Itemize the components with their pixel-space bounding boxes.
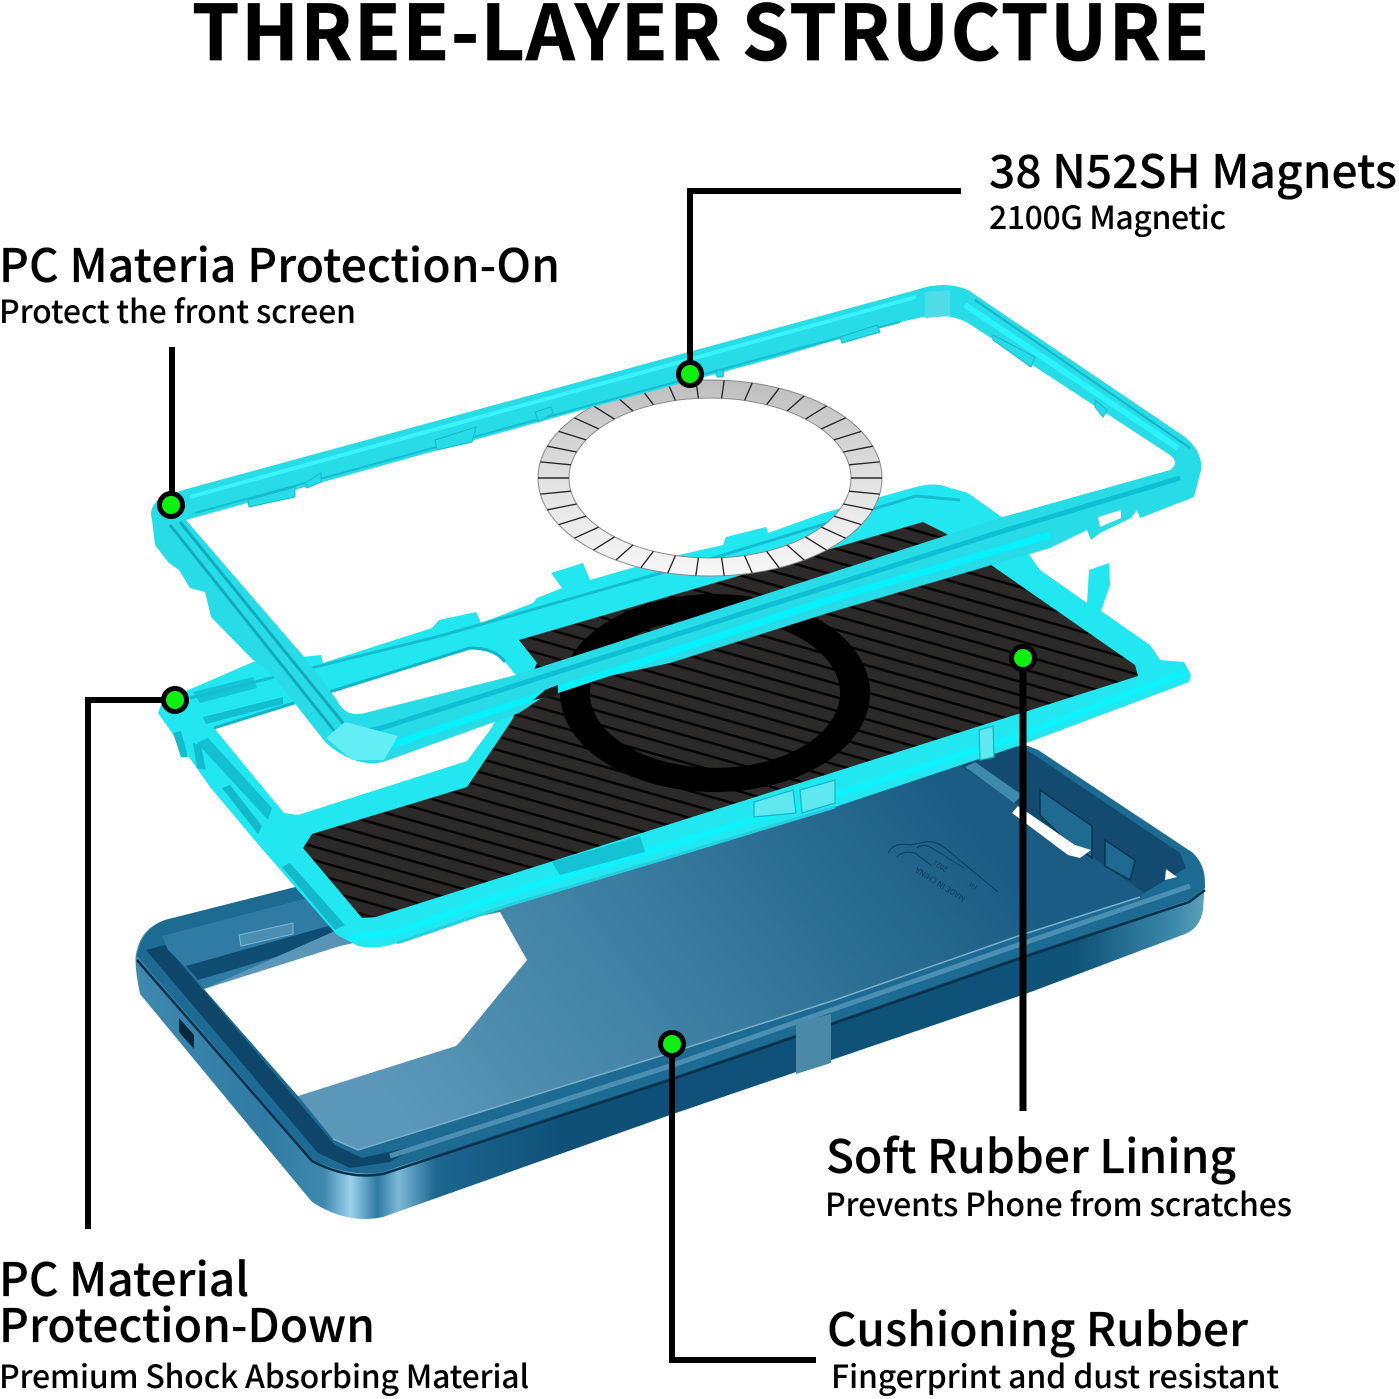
charging port <box>179 1018 194 1049</box>
layer: PC material protection-on frame <box>151 285 1201 763</box>
label: magnets <box>989 136 1397 239</box>
label: protection on <box>0 230 560 333</box>
label: protection down: Premium Shock Absorbing Material <box>0 1352 529 1398</box>
camera opening <box>214 648 520 815</box>
recess light strip <box>965 762 1022 803</box>
camera rim <box>214 648 505 728</box>
left rim dark band <box>146 945 420 1168</box>
bottom tabs dark <box>552 836 645 875</box>
black carbon panel <box>303 522 1138 918</box>
marker dots <box>160 362 1034 1056</box>
case top rim <box>137 735 1205 1173</box>
lower left dark strips <box>222 785 345 930</box>
upper frame body <box>151 285 1201 763</box>
top bar shadow strip <box>186 920 350 980</box>
slots at lower frame end <box>173 731 206 770</box>
embossed marking: Fit <box>967 879 980 892</box>
black magnetic ring <box>560 594 870 792</box>
upper frame bottom bar <box>345 478 1180 731</box>
corner highlight <box>925 290 950 318</box>
lower frame bright bottom edge <box>350 672 1186 938</box>
layer: PC material protection-down frame <box>158 484 1191 947</box>
rim groove <box>137 890 1205 1175</box>
upper frame right edge <box>965 305 1178 448</box>
white camera cutout <box>204 912 527 1096</box>
leader line: cushioning <box>672 1044 816 1360</box>
leader line: magnets <box>690 191 961 374</box>
label: cushioning rubber <box>827 1294 1279 1398</box>
leader line: soft rubber <box>1020 658 1026 1111</box>
label: protection on: PC Materia Protection-On <box>0 230 560 296</box>
rim bottom highlight <box>390 886 1190 1156</box>
lower frame top bars <box>193 677 257 703</box>
case side wall <box>136 735 1205 1219</box>
white corner notch <box>1165 869 1177 880</box>
hole left dark strip <box>197 738 272 820</box>
bottom corner highlight <box>326 722 398 760</box>
lower frame bottom tabs <box>754 726 994 817</box>
upper frame groove <box>195 322 900 513</box>
label: protection on: Protect the front screen <box>0 287 356 333</box>
upper frame tabs <box>248 325 1107 507</box>
white slot <box>1012 806 1091 858</box>
centre tab <box>796 1014 831 1074</box>
embossed marking: MADE IN CHINA <box>913 864 968 904</box>
frame small gap <box>533 685 558 700</box>
lower frame lower shadow <box>397 807 835 943</box>
recess buttons <box>1040 790 1135 880</box>
inner back wall <box>204 765 1144 1150</box>
magnet segment dividers <box>538 380 882 576</box>
layer: soft rubber lining panel <box>303 522 1138 918</box>
frame window <box>1098 510 1121 527</box>
label: protection down <box>0 1244 529 1398</box>
top right recess <box>960 740 1186 893</box>
label: soft rubber lining <box>825 1121 1292 1226</box>
upper frame top highlight <box>190 297 916 497</box>
label: protection down: PC Material <box>0 1244 249 1310</box>
layer: cushioning rubber outer case <box>136 735 1205 1219</box>
back wall edge line <box>333 897 1140 1150</box>
label: soft rubber lining: Soft Rubber Lining <box>826 1121 1236 1187</box>
label: magnets: 2100G Magnetic <box>989 193 1226 239</box>
magnet ring <box>538 380 882 576</box>
lower frame body <box>158 484 1191 947</box>
side button <box>239 923 293 946</box>
embossed marking <box>888 842 998 904</box>
upper frame left grooves <box>170 522 347 738</box>
leader line: protection on <box>169 347 175 505</box>
embossed marking: 2021 <box>931 857 950 874</box>
label: soft rubber lining: Prevents Phone from scratches <box>825 1180 1292 1226</box>
top bar recess <box>162 880 420 989</box>
label: cushioning rubber: Cushioning Rubber <box>827 1294 1248 1360</box>
label: magnets: 38 N52SH Magnets <box>989 136 1397 202</box>
label: cushioning rubber: Fingerprint and dust resistant <box>831 1352 1279 1398</box>
label: protection down: Protection-Down <box>0 1290 375 1356</box>
leader line: protection down <box>88 700 175 1229</box>
